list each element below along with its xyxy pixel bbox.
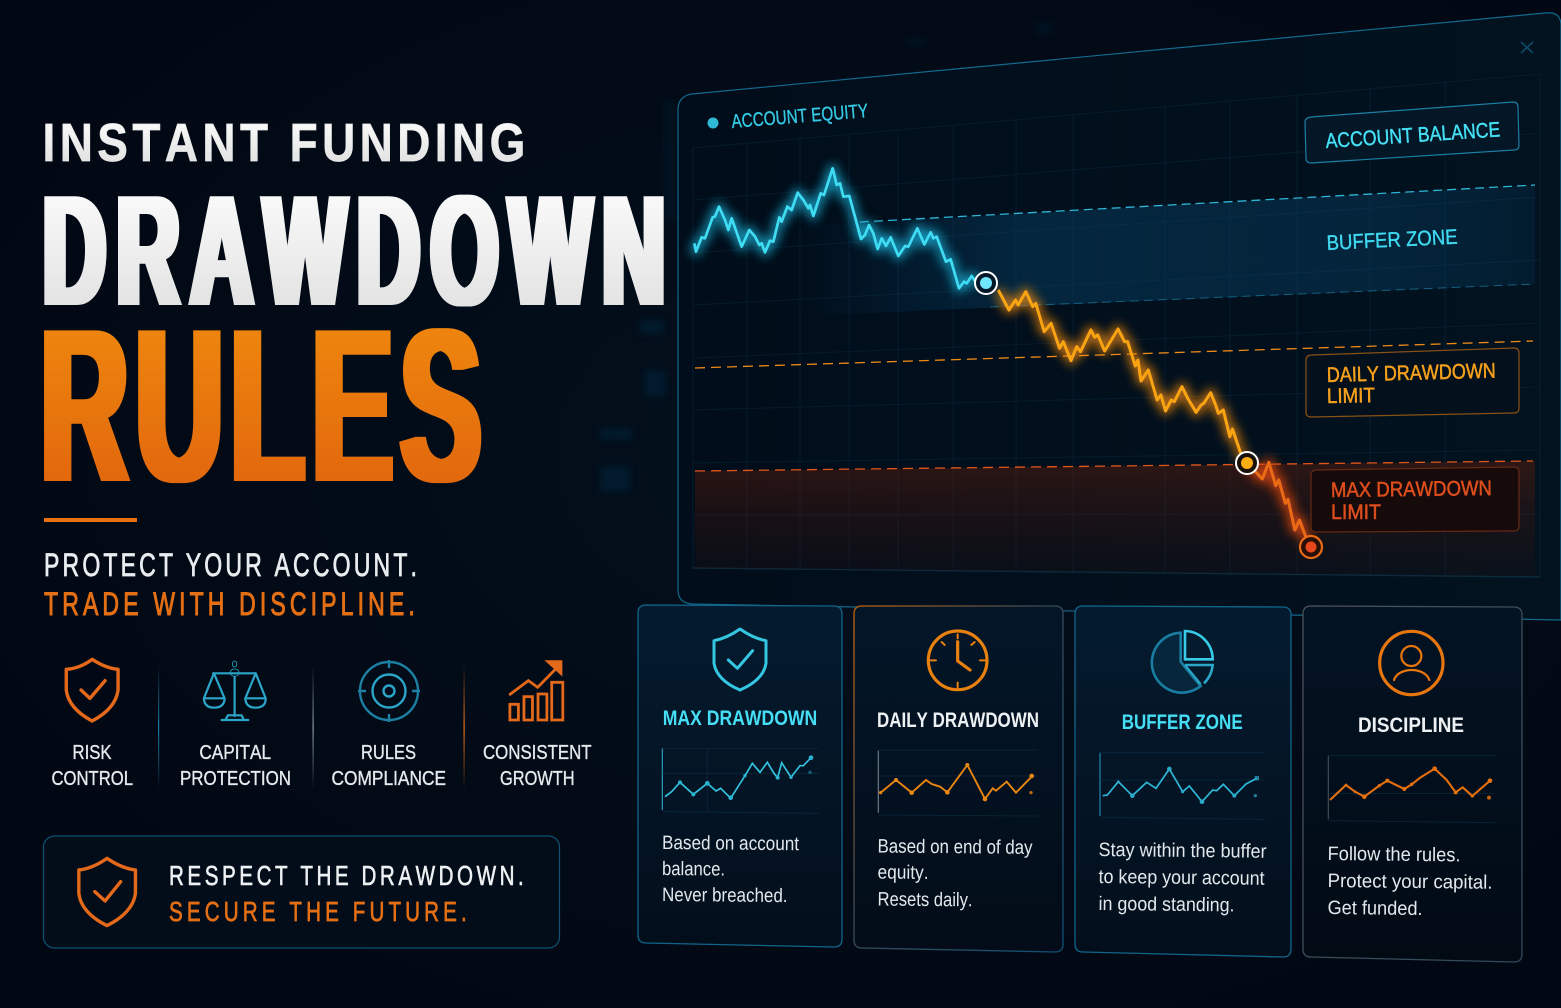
subtitle: PROTECT YOUR ACCOUNT. xyxy=(44,547,417,583)
heading: BUFFER ZONE xyxy=(1122,710,1243,734)
label: max drawdown limit xyxy=(1311,467,1519,532)
daily drawdown limit line xyxy=(695,341,1533,368)
max drawdown limit line xyxy=(695,461,1533,471)
body text xyxy=(1327,843,1493,920)
title: instant funding: INSTANT FUNDING xyxy=(42,113,525,173)
subtitle: TRADE WITH DISCIPLINE. xyxy=(44,586,415,622)
body text: to keep your account xyxy=(1098,866,1265,890)
label: account balance xyxy=(1305,102,1519,163)
title block xyxy=(41,113,665,622)
divider 3 xyxy=(464,665,465,790)
heading: DISCIPLINE xyxy=(1358,713,1464,737)
label: daily drawdown limit xyxy=(1306,348,1519,417)
subtitle xyxy=(44,547,417,622)
body text: Never breached. xyxy=(662,884,788,907)
equity line glow xyxy=(694,168,1310,547)
marker: max limit xyxy=(1300,536,1322,558)
title: rules: RULES xyxy=(41,284,481,528)
icon: consistent growth xyxy=(509,662,563,720)
mini chart xyxy=(878,750,1038,816)
icon: person xyxy=(1380,631,1443,695)
title: drawdown: DRAWDOWN xyxy=(43,164,665,340)
body text: balance. xyxy=(662,858,725,881)
text: risk control xyxy=(52,742,133,790)
card: discipline xyxy=(1303,606,1522,962)
panel frame xyxy=(678,13,1561,620)
body text xyxy=(1098,839,1267,916)
card: buffer zone xyxy=(1075,606,1291,957)
body text xyxy=(877,836,1033,911)
text: consistent growth: GROWTH xyxy=(500,768,575,790)
body text: Resets daily. xyxy=(877,889,973,911)
label: account balance: ACCOUNT BALANCE xyxy=(1325,118,1501,153)
label: max drawdown limit: LIMIT xyxy=(1331,501,1381,524)
text: consistent growth xyxy=(483,742,592,790)
panel: equity chart xyxy=(678,13,1561,620)
max drawdown zone band xyxy=(695,461,1535,576)
divider 2 xyxy=(312,665,314,790)
text: capital protection: CAPITAL xyxy=(199,742,271,764)
text: rules compliance: RULES xyxy=(361,742,416,764)
icon: capital protection scales xyxy=(204,661,266,720)
mini chart xyxy=(1100,753,1265,819)
legend: account equity xyxy=(708,100,869,133)
buffer zone band xyxy=(800,185,1535,316)
text: capital protection: PROTECTION xyxy=(180,768,291,790)
equity line: daily breach xyxy=(998,290,1247,463)
legend: account equity: ACCOUNT EQUITY xyxy=(731,100,869,133)
heading: MAX DRAWDOWN xyxy=(663,706,817,730)
text: risk control: RISK xyxy=(72,742,112,764)
body text: equity. xyxy=(877,862,929,884)
buffer zone top line xyxy=(860,185,1535,222)
body text: Protect your capital. xyxy=(1327,870,1493,894)
icon: callout shield xyxy=(79,858,135,926)
marker: daily limit xyxy=(1236,452,1258,474)
mini chart xyxy=(662,748,818,813)
body text: Based on account xyxy=(662,832,800,855)
body text: in good standing. xyxy=(1098,893,1235,916)
body text: Based on end of day xyxy=(877,836,1033,859)
icon: risk control shield xyxy=(66,659,118,721)
text: consistent growth: CONSISTENT xyxy=(483,742,592,764)
mini chart xyxy=(1328,756,1495,823)
card: daily drawdown xyxy=(854,606,1063,952)
equity line: max breach xyxy=(1247,462,1310,547)
callout text: RESPECT THE DRAWDOWN. xyxy=(169,861,524,892)
callout: respect the drawdown xyxy=(44,836,560,948)
buffer zone bottom line xyxy=(990,284,1535,307)
icon: rules compliance target xyxy=(358,660,420,722)
chart grid xyxy=(693,74,1540,577)
body text xyxy=(662,832,800,907)
body text: Get funded. xyxy=(1327,897,1423,920)
text: risk control: CONTROL xyxy=(52,768,133,790)
body text: Follow the rules. xyxy=(1327,843,1461,866)
close mark xyxy=(1521,42,1533,53)
icon: shield xyxy=(714,629,766,690)
label: daily drawdown limit: DAILY DRAWDOWN xyxy=(1327,360,1496,387)
marker: buffer exit xyxy=(975,272,997,294)
background data glow xyxy=(600,22,1053,492)
heading: DAILY DRAWDOWN xyxy=(877,708,1039,732)
label: max drawdown limit: MAX DRAWDOWN xyxy=(1331,477,1492,502)
equity line: safe xyxy=(694,168,977,288)
card: max drawdown xyxy=(638,605,842,947)
label: daily drawdown limit: LIMIT xyxy=(1327,384,1375,408)
icon: clock xyxy=(928,631,987,690)
label: buffer zone: BUFFER ZONE xyxy=(1326,226,1458,255)
divider 1 xyxy=(158,665,159,790)
text: rules compliance: COMPLIANCE xyxy=(332,768,446,790)
icon: pie chart xyxy=(1152,631,1213,693)
text: capital protection xyxy=(180,742,291,790)
feature row xyxy=(52,659,592,790)
callout text xyxy=(169,861,524,928)
callout text: SECURE THE FUTURE. xyxy=(169,897,467,928)
text: rules compliance xyxy=(332,742,446,790)
body text: Stay within the buffer xyxy=(1098,839,1267,863)
orange accent bar xyxy=(44,518,137,522)
